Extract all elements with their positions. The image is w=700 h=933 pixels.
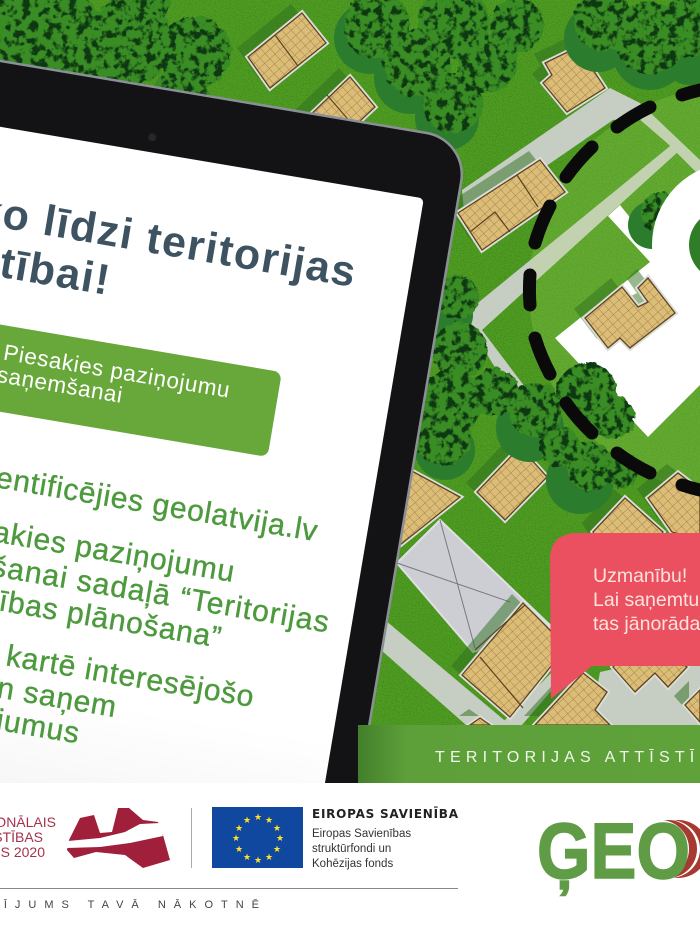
icon: EU flag: ★ [273, 823, 281, 833]
footer [0, 783, 700, 933]
camera [148, 133, 157, 142]
callout text: Uzmanību! [593, 565, 687, 587]
national development plan text [0, 814, 56, 860]
divider [191, 808, 192, 868]
warning callout [550, 533, 700, 699]
roof ridge lines [275, 35, 538, 708]
white lot [555, 205, 700, 437]
icon: EU flag: ★ [243, 815, 251, 825]
tablet body [0, 42, 468, 929]
tree shadows [334, 2, 700, 514]
icon: EU flag: ★ [254, 812, 262, 822]
house roofs [248, 13, 700, 725]
step 2 [0, 500, 338, 672]
dashed selection circle [529, 90, 700, 490]
icon: EU flag: ★ [232, 833, 240, 843]
house shadows [237, 4, 689, 716]
icon: EU flag: ★ [243, 852, 251, 862]
button text: Piesakies paziņojumu [2, 340, 232, 403]
trees [0, 0, 700, 491]
rule [0, 888, 458, 889]
tablet screen [0, 107, 424, 923]
icon: EU flag: ★ [254, 855, 262, 865]
green button [0, 302, 282, 457]
roads [372, 88, 700, 725]
icon: EU flag: ★ [276, 833, 284, 843]
icon: Latvia map [67, 808, 170, 868]
icon: EU flag: ★ [265, 815, 273, 825]
EU heading: EIROPAS SAVIENĪBA [312, 807, 459, 821]
EU fund text: struktūrfondi un [312, 843, 391, 855]
step 3 [0, 614, 257, 778]
icon: EU flag: ★ [265, 852, 273, 862]
EU fund text [312, 828, 411, 870]
house borders [248, 13, 700, 725]
gray parking lot [397, 520, 552, 652]
location pin [652, 162, 700, 328]
green banner [358, 725, 700, 783]
highlight circle [529, 86, 700, 494]
icon: EU flag: ★ [273, 844, 281, 854]
icon: EU flag: ★ [235, 844, 243, 854]
callout text: Lai saņemtu [593, 589, 699, 611]
icon: EU flag [212, 807, 303, 868]
tablet [0, 42, 468, 929]
callout text [593, 565, 700, 635]
callout text: tas jānorāda [593, 613, 700, 635]
EU fund text: Kohēzijas fonds [312, 858, 393, 870]
pin hole [689, 209, 700, 281]
icon: EU flag: ★ [235, 823, 243, 833]
EU fund text: Eiropas Savienības [312, 828, 411, 840]
